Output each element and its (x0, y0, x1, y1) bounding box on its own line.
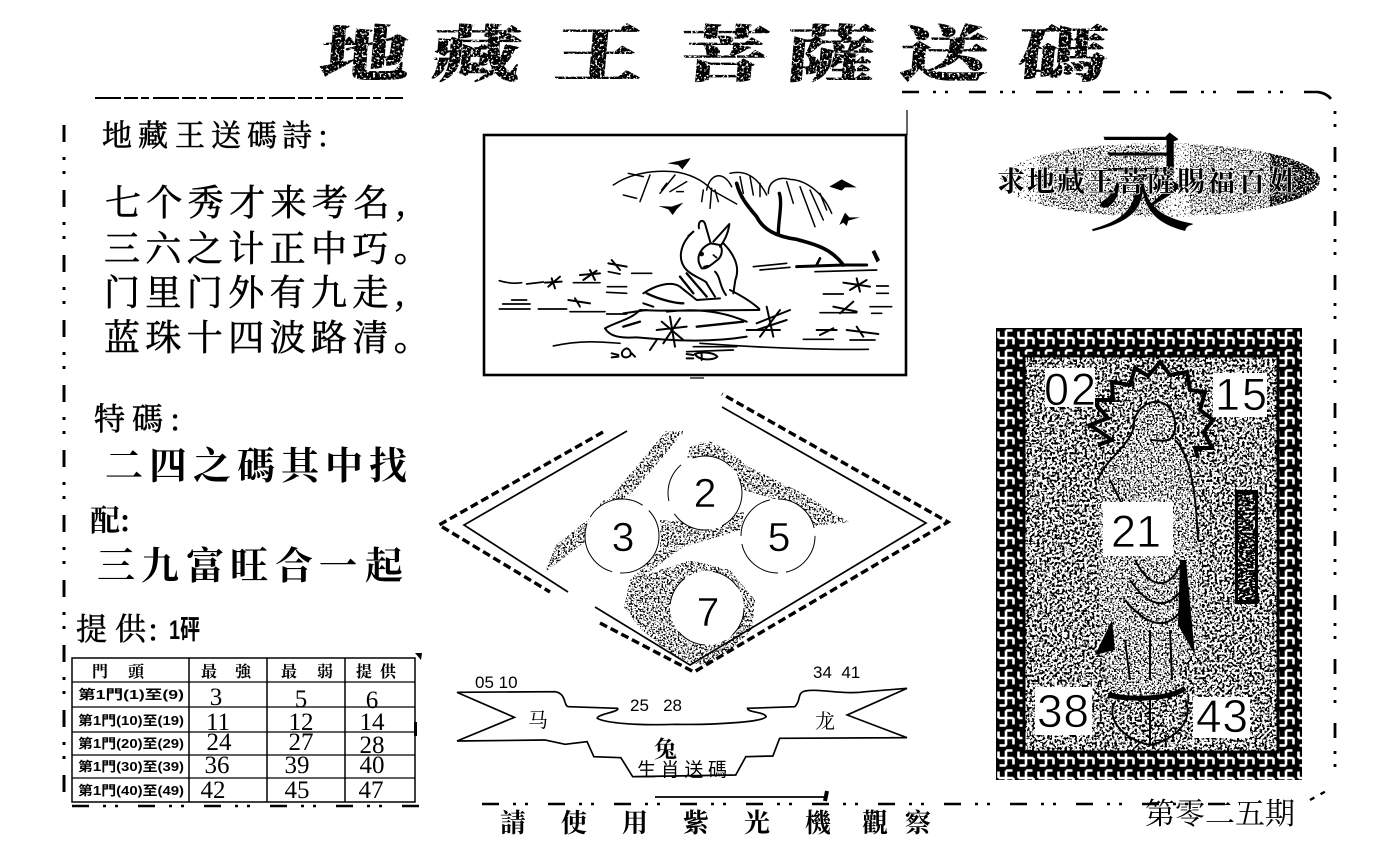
number circles (585, 456, 815, 645)
number 43: 43 (1196, 690, 1248, 742)
panel: lucky number diamond (439, 394, 948, 672)
birds (658, 158, 880, 263)
ribbon labels: 34 41 (813, 663, 860, 682)
special code label: 特碼: (94, 394, 180, 439)
diamond outer dashed border (439, 394, 948, 672)
table numbers (200, 684, 385, 804)
footer instruction: 請使用紫光機觀察 (500, 803, 931, 840)
zodiac names (528, 704, 835, 781)
number 21 (1103, 502, 1173, 557)
table headers: 提供 (356, 659, 397, 682)
seal (1235, 490, 1258, 604)
ribbon labels: 05 10 (475, 673, 518, 692)
table numbers: 39 (284, 752, 310, 779)
table row labels: 第1門(30)至(39) (78, 759, 184, 774)
poem: 门里门外有九走, (104, 265, 411, 316)
title: 地藏王菩薩送碼 (316, 6, 1112, 94)
panel: bodhisattva card (996, 328, 1302, 780)
table numbers: 3 (210, 684, 222, 711)
poem: 七个秀才来考名, (105, 175, 412, 226)
willow branches (613, 171, 832, 227)
icon: standing figure (1090, 362, 1213, 745)
provider: 1砰 (169, 615, 200, 645)
blessing text: 求地藏王菩薩賜福百姓 (997, 160, 1298, 200)
pairing label: 配: (90, 496, 130, 540)
circle numbers: 5 (768, 514, 790, 560)
table row labels: 第1門(10)至(19) (78, 713, 184, 728)
ribbon labels: 25 28 (630, 696, 682, 715)
tree trunk (737, 183, 867, 267)
table row labels: 第1門(20)至(29) (78, 736, 184, 751)
ribbon labels (475, 663, 860, 715)
table numbers: 40 (360, 752, 384, 779)
diamond inner line (464, 407, 926, 665)
poem: 蓝珠十四波路清。 (104, 310, 435, 361)
provider (76, 604, 200, 649)
table numbers: 11 (206, 709, 230, 736)
robe folds (1098, 402, 1198, 680)
water and grass lines (499, 263, 892, 352)
lotus base (1108, 688, 1188, 745)
number 15: 15 (1215, 369, 1267, 420)
issue number: 第零二五期 (1145, 789, 1295, 833)
badge: speckled oval with spirit glyph (998, 132, 1320, 232)
number 38: 38 (1037, 685, 1089, 737)
table numbers: 42 (200, 777, 226, 804)
table numbers: 12 (288, 709, 314, 736)
speckled ground (1024, 356, 1278, 752)
pairing clue: 三九富旺合一起 (97, 535, 403, 590)
table numbers: 14 (360, 709, 385, 736)
speckled oval (1000, 140, 1320, 220)
table headers: 最強 (201, 659, 253, 682)
circle numbers: 2 (694, 470, 716, 516)
panel: rabbit illustration (484, 110, 907, 378)
provider: 提供: (76, 604, 158, 649)
table headers: 門頭 (92, 659, 145, 682)
halo (1090, 362, 1213, 458)
grass tufts (545, 260, 878, 360)
zodiac names: 龙 (815, 705, 835, 734)
table headers (92, 659, 397, 682)
number table (72, 653, 422, 804)
table row labels: 第1門(1)至(9) (78, 687, 184, 702)
poem heading: 地藏王送碼詩: (102, 111, 328, 155)
table row labels: 第1門(40)至(49) (78, 783, 184, 798)
table numbers: 36 (204, 752, 230, 779)
rabbit and willow drawing (499, 158, 892, 360)
fret border (996, 328, 1302, 780)
number 21: 21 (1111, 506, 1161, 557)
circle numbers (612, 470, 790, 635)
table numbers: 47 (358, 777, 384, 804)
zodiac names: 兔 (654, 731, 677, 764)
poem: 三六之计正中巧。 (104, 221, 435, 272)
robe shadows (1095, 560, 1195, 655)
dashed outer frame (64, 92, 1335, 806)
circle numbers: 7 (697, 589, 719, 635)
spirit glyph: 灵 (1088, 98, 1196, 253)
figure body (1098, 402, 1203, 690)
table numbers: 24 (206, 729, 232, 756)
table numbers: 27 (288, 729, 314, 756)
table numbers: 5 (295, 686, 307, 713)
table row labels (78, 687, 184, 798)
table numbers: 45 (284, 777, 310, 804)
circle numbers: 3 (612, 514, 634, 560)
rock (605, 273, 759, 341)
speckled cloud shapes (545, 431, 849, 665)
zodiac names: 生肖送碼 (637, 759, 727, 781)
table headers: 最弱 (281, 659, 333, 682)
number 02: 02 (1044, 364, 1096, 415)
poem (104, 175, 435, 361)
table numbers: 6 (366, 687, 378, 714)
special code clue: 二四之碼其中找 (105, 435, 407, 490)
ribbon: zodiac codes (457, 663, 907, 781)
table numbers: 28 (360, 732, 384, 759)
icon: rabbit (681, 221, 737, 297)
zodiac names: 马 (528, 704, 548, 733)
